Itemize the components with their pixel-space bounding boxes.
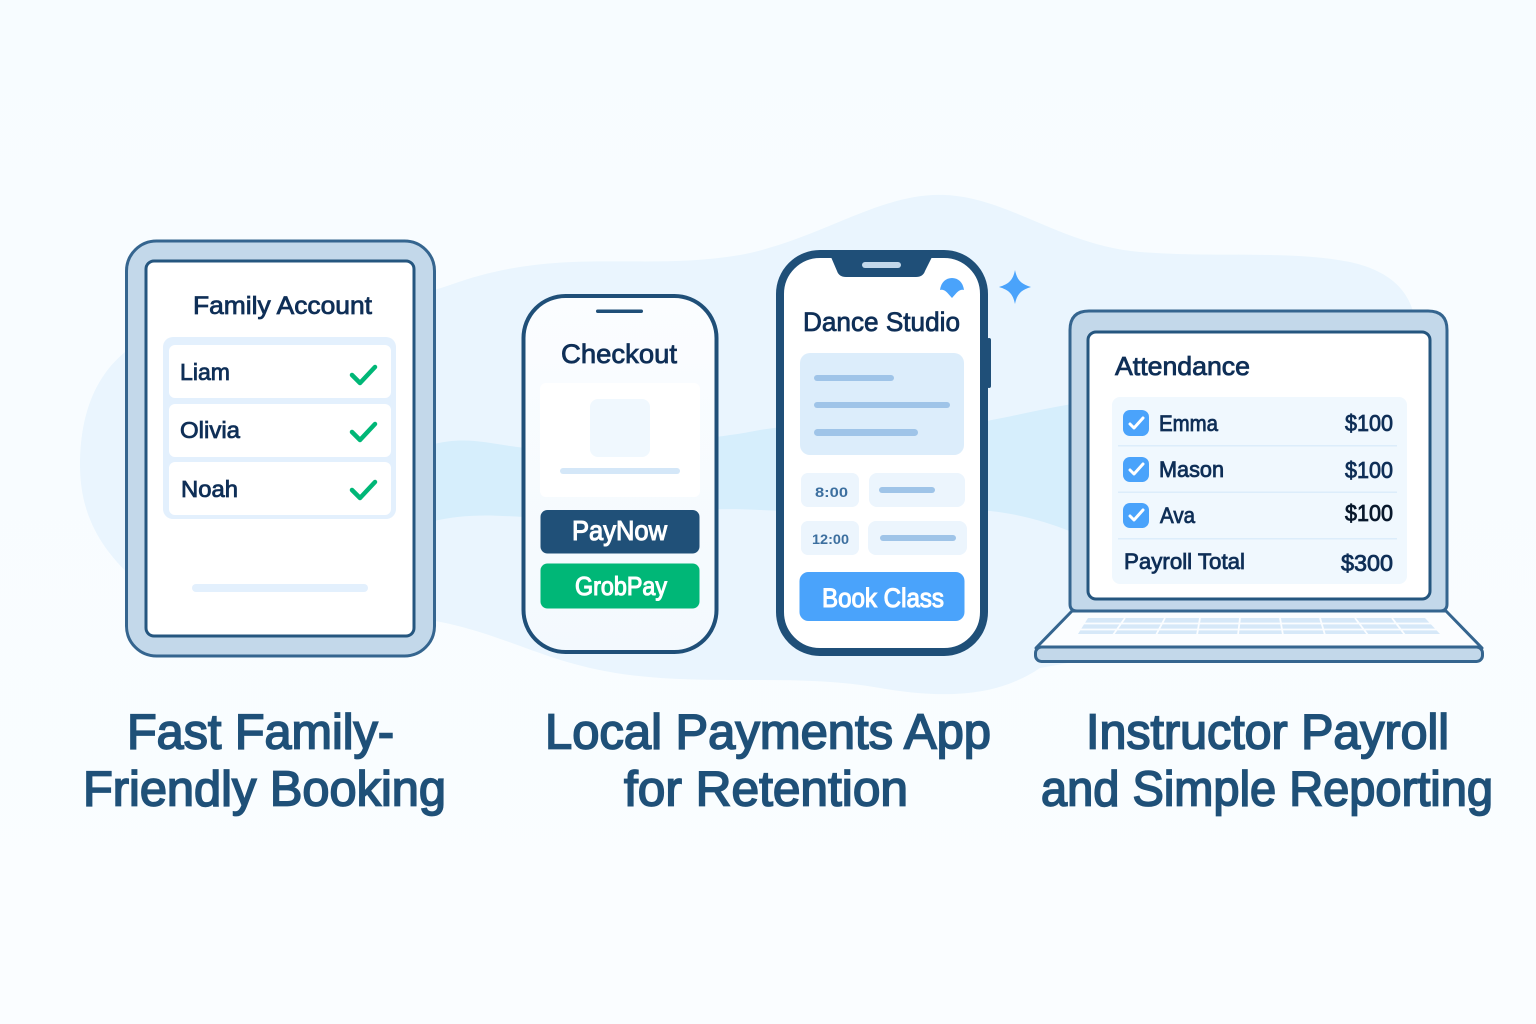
family member list: Olivia [180, 417, 240, 443]
icon: sparkle [999, 270, 1031, 304]
attendance table: $100 [1345, 410, 1393, 436]
attendance table: Payroll Total [1124, 549, 1245, 574]
attendance table: $300 [1341, 550, 1393, 576]
caption: family booking: Friendly Booking [83, 762, 446, 816]
laptop: attendance [1036, 311, 1482, 662]
caption: local payments: for Retention [624, 762, 908, 816]
attendance table: Emma [1159, 411, 1219, 436]
caption: instructor payroll: Instructor Payroll [1086, 706, 1449, 760]
family member list: Liam [180, 359, 230, 385]
PayNow button: PayNow [572, 515, 668, 546]
attendance table: Ava [1160, 503, 1196, 528]
attendance table [1112, 397, 1407, 584]
notification icon [940, 278, 964, 298]
dance studio heading: Dance Studio [803, 307, 960, 337]
attendance table: $100 [1345, 500, 1393, 526]
caption: local payments [545, 706, 991, 816]
caption: family booking: Fast Family- [127, 706, 394, 760]
class info panel [800, 353, 964, 455]
caption: instructor payroll [1041, 706, 1493, 816]
family member list: Noah [181, 476, 238, 502]
Book Class button: Book Class [822, 583, 944, 613]
Book Class button [800, 572, 964, 621]
checkout card [540, 383, 700, 497]
PayNow button [540, 510, 700, 554]
tablet: family account [126, 241, 434, 656]
attendance heading: Attendance [1115, 351, 1250, 381]
attendance table: Mason [1159, 457, 1224, 482]
family member list [163, 337, 396, 519]
caption: family booking [83, 706, 446, 816]
GrobPay button: GrobPay [575, 571, 667, 601]
caption: local payments: Local Payments App [545, 706, 991, 760]
GrobPay button [540, 564, 700, 608]
schedule slots: 8:00 [815, 484, 848, 500]
tablet placeholder bar [192, 584, 368, 592]
attendance table: $100 [1345, 457, 1393, 483]
phone: checkout [524, 296, 716, 652]
phone: dance studio [780, 254, 991, 652]
background blob [80, 195, 1420, 694]
tablet heading: Family Account [193, 292, 372, 320]
caption: instructor payroll: and Simple Reporting [1041, 762, 1493, 816]
schedule slots: 12:00 [812, 531, 849, 547]
laptop base [1036, 611, 1482, 662]
checkout heading: Checkout [561, 339, 677, 369]
schedule slots [801, 473, 967, 555]
background wave band [430, 404, 1072, 532]
